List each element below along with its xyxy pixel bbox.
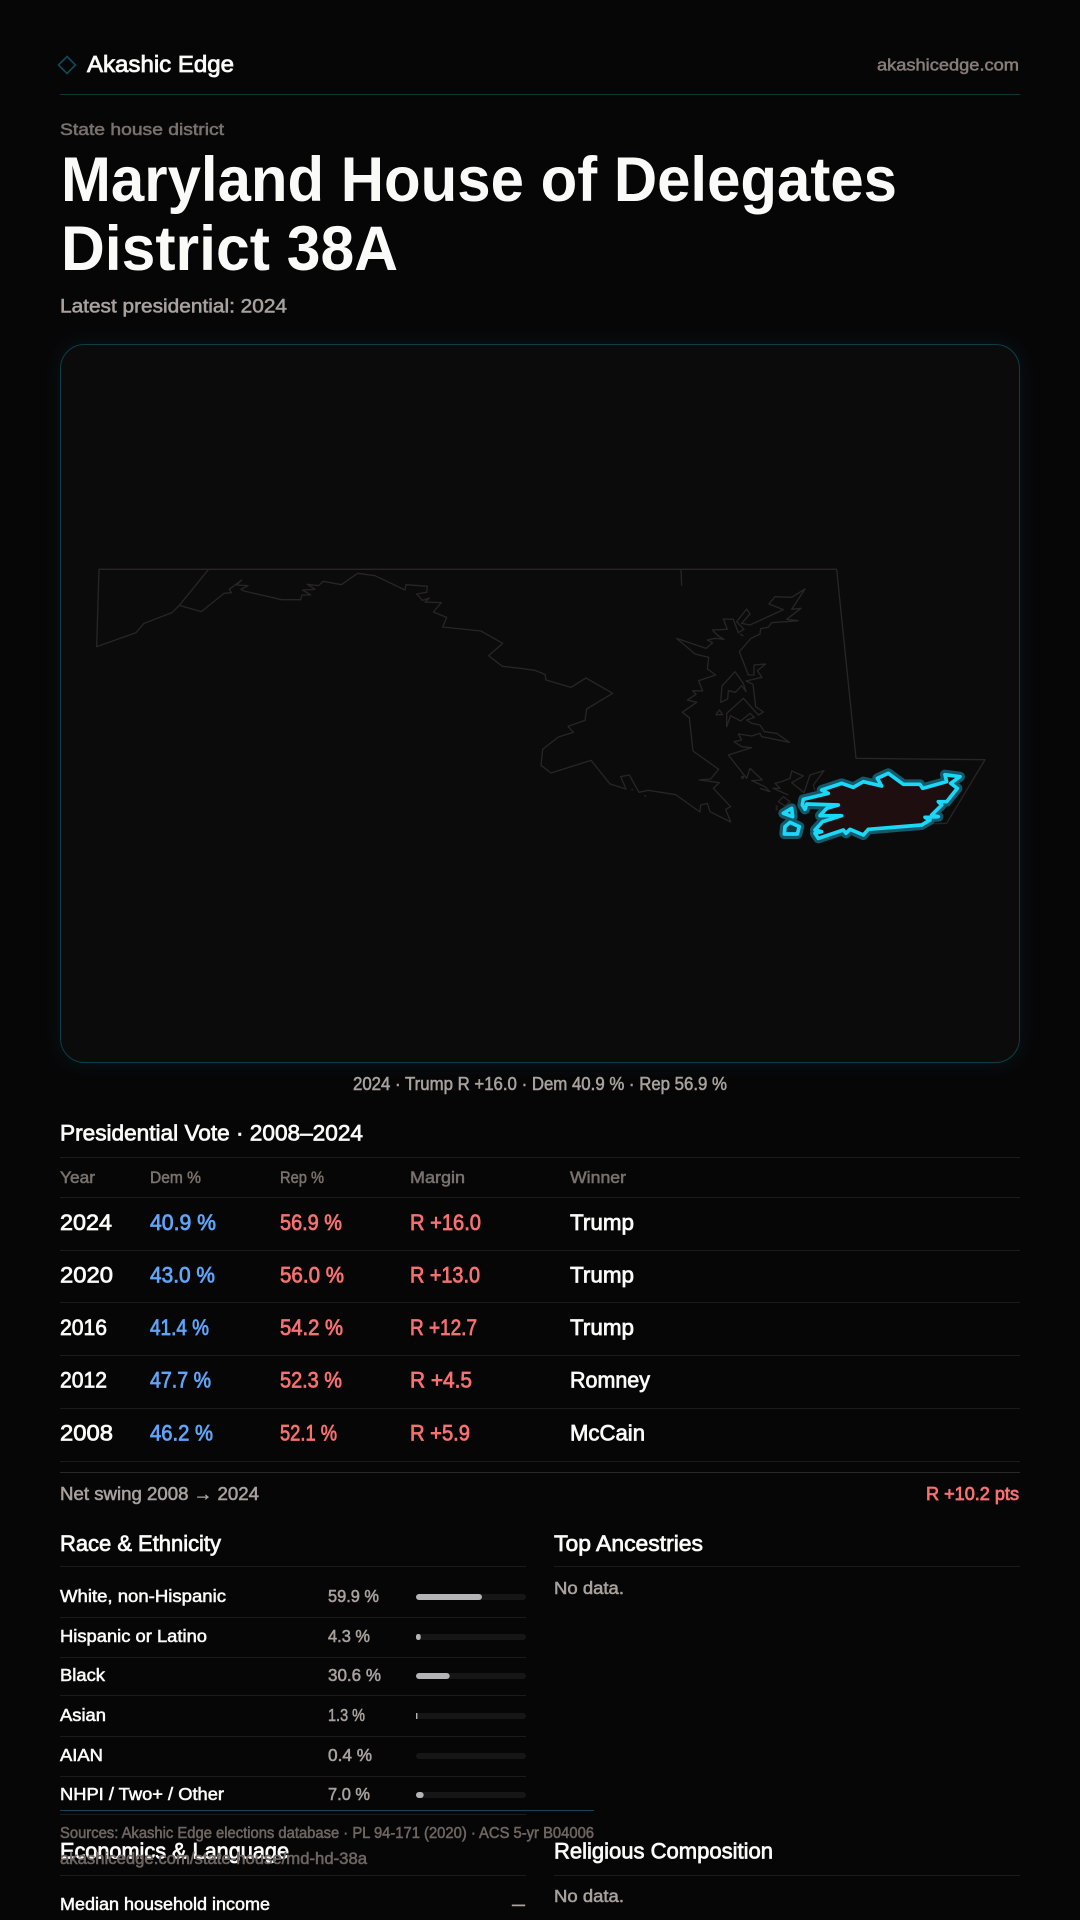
row 2016: Trump — [570, 1315, 634, 1340]
row 2020: Trump — [570, 1262, 634, 1288]
panel: economics and language — [60, 1838, 526, 1914]
row 2016: R +12.7 — [410, 1315, 477, 1340]
row 2024: R +16.0 — [410, 1210, 481, 1235]
row 2008: McCain — [570, 1420, 645, 1446]
row: asian — [60, 1705, 526, 1725]
row 2012: R +4.5 — [410, 1368, 472, 1392]
main title: District 38A — [61, 214, 398, 284]
table header row — [60, 1168, 626, 1187]
site url: akashicedge.com — [877, 56, 1019, 74]
row 2008: R +5.9 — [410, 1420, 470, 1446]
header: brand bar — [58, 51, 1020, 95]
footer: sources overlay: akashicedge.com/state-house/md-hd-38a — [60, 1850, 368, 1868]
panel: economics and language: — — [512, 1894, 525, 1914]
title block — [60, 120, 897, 318]
row: other — [60, 1784, 526, 1804]
eyebrow: State house district — [60, 120, 224, 139]
panel: economics and language: Economics & Language — [60, 1838, 289, 1864]
row 2024: Trump — [570, 1210, 634, 1235]
row 2016: 54.2 % — [280, 1315, 343, 1340]
row 2020 — [60, 1262, 634, 1288]
panel: presidential vote table — [60, 1120, 1020, 1504]
row 2012: 47.7 % — [150, 1368, 211, 1392]
row 2024: 56.9 % — [280, 1210, 342, 1235]
map caption: 2024 · Trump R +16.0 · Dem 40.9 % · Rep 56.9 % — [353, 1074, 727, 1094]
row: black — [60, 1665, 526, 1685]
row 2008: 46.2 % — [150, 1420, 213, 1446]
row 2012: 2012 — [60, 1368, 107, 1392]
net swing row: R +10.2 pts — [926, 1484, 1019, 1504]
panel: economics and language: Median household income — [60, 1894, 270, 1914]
row 2024 — [60, 1210, 634, 1235]
row: hispanic: 4.3 % — [328, 1626, 370, 1646]
row 2016: 2016 — [60, 1315, 107, 1340]
panel: top ancestries: Top Ancestries — [554, 1531, 703, 1556]
table header row: Year — [60, 1168, 95, 1187]
row 2020: 2020 — [60, 1262, 113, 1288]
row 2008 — [60, 1420, 645, 1446]
row: aian: AIAN — [60, 1745, 103, 1765]
panel: race and ethnicity — [60, 1531, 526, 1815]
brand name: Akashic Edge — [87, 51, 234, 77]
table heading: Presidential Vote · 2008–2024 — [60, 1120, 363, 1146]
row 2020: R +13.0 — [410, 1262, 480, 1288]
row 2016 — [60, 1315, 634, 1340]
panel: religious composition — [554, 1838, 1020, 1906]
row: hispanic — [60, 1626, 526, 1646]
row: black: Black — [60, 1665, 105, 1685]
row: white: White, non-Hispanic — [60, 1586, 226, 1606]
row 2008: 2008 — [60, 1420, 113, 1446]
row: other: NHPI / Two+ / Other — [60, 1784, 224, 1804]
panel: top ancestries — [554, 1531, 1020, 1598]
footer: sources overlay: Sources: Akashic Edge elections database · PL 94-171 (2020) · ACS 5-yr B04006 — [60, 1825, 594, 1842]
panel: religious composition: No data. — [554, 1886, 624, 1906]
icon: brand diamond — [58, 56, 76, 74]
heading: Race & Ethnicity — [60, 1531, 222, 1556]
row: asian: 1.3 % — [328, 1705, 365, 1725]
main title: Maryland House of Delegates — [61, 145, 897, 215]
map: district 38A highlight — [783, 773, 960, 838]
row 2020: 56.0 % — [280, 1262, 344, 1288]
row: white: 59.9 % — [328, 1586, 379, 1606]
net swing row: Net swing 2008 → 2024 — [60, 1484, 259, 1504]
row: white — [60, 1586, 526, 1606]
subtitle: Latest presidential: 2024 — [60, 296, 287, 318]
row 2024: 40.9 % — [150, 1210, 216, 1235]
row 2012 — [60, 1368, 650, 1392]
panel: state map — [60, 344, 1020, 1063]
net swing row — [60, 1484, 1019, 1504]
table header row: Dem % — [150, 1168, 201, 1187]
row: aian — [60, 1745, 526, 1765]
row 2020: 43.0 % — [150, 1262, 215, 1288]
panel: religious composition: Religious Composition — [554, 1838, 773, 1864]
table header row: Rep % — [280, 1168, 324, 1187]
row 2024: 2024 — [60, 1210, 112, 1235]
footer: sources overlay — [60, 1810, 594, 1868]
row: black: 30.6 % — [328, 1665, 381, 1685]
row 2012: 52.3 % — [280, 1368, 342, 1392]
table header row: Margin — [410, 1168, 465, 1187]
row: hispanic: Hispanic or Latino — [60, 1626, 207, 1646]
row 2008: 52.1 % — [280, 1420, 337, 1446]
row: other: 7.0 % — [328, 1784, 370, 1804]
row: aian: 0.4 % — [328, 1745, 372, 1765]
row: asian: Asian — [60, 1705, 106, 1725]
panel: top ancestries: No data. — [554, 1578, 624, 1598]
table header row: Winner — [570, 1168, 626, 1187]
row 2016: 41.4 % — [150, 1315, 209, 1340]
map: Maryland outline — [97, 569, 520, 668]
row 2012: Romney — [570, 1368, 650, 1392]
